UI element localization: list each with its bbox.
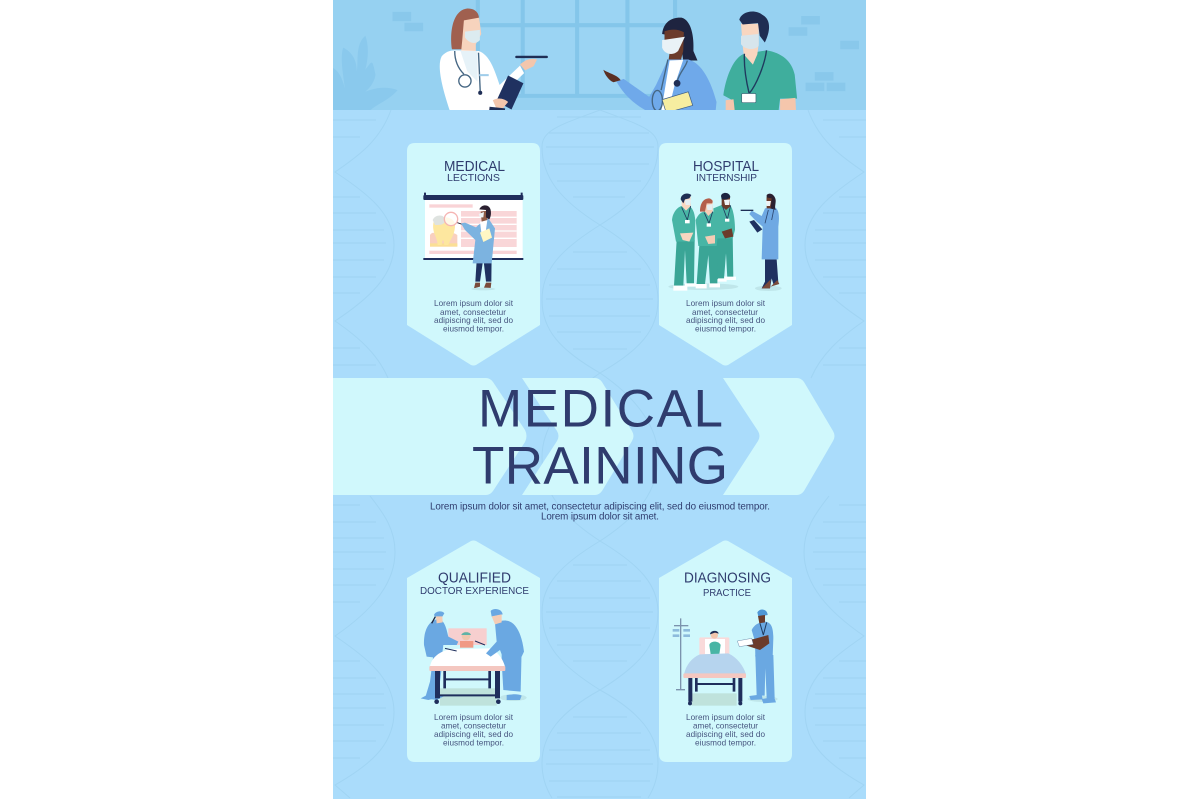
central chevrons	[333, 378, 834, 495]
illustration: lecturer at anatomy board	[423, 193, 523, 290]
illustration: surgeons at operating table	[421, 609, 527, 706]
subheading: INTERNSHIP	[696, 172, 757, 184]
doctor with yellow folder	[603, 18, 717, 113]
card shape	[659, 143, 792, 366]
window	[478, 0, 675, 96]
doctor with clipboard	[440, 8, 548, 112]
body text: Lorem ipsum dolor sit	[686, 299, 766, 308]
panel: qualified doctor experience	[407, 540, 540, 762]
body text	[434, 299, 514, 334]
subheading: LECTIONS	[447, 172, 500, 184]
card shape	[407, 540, 540, 762]
body text: adipiscing elit, sed do	[686, 316, 765, 325]
body text: Lorem ipsum dolor sit	[434, 299, 514, 308]
panel: medical lections	[407, 143, 540, 366]
subtitle text: Lorem ipsum dolor sit amet.	[541, 512, 659, 522]
header illustration: three masked doctors	[333, 0, 866, 113]
body text	[686, 299, 766, 334]
body text: eiusmod tempor.	[695, 738, 756, 748]
subtitle text: Lorem ipsum dolor sit amet, consectetur adipiscing elit, sed do eiusmod tempor.	[430, 502, 770, 512]
poster background	[333, 110, 866, 799]
heading: QUALIFIED	[438, 570, 511, 586]
card shape	[407, 143, 540, 366]
subheading: PRACTICE	[703, 587, 751, 599]
body text: Lorem ipsum dolor sit	[434, 713, 514, 722]
title: TRAINING	[472, 436, 728, 496]
panel: diagnosing practice	[659, 540, 792, 762]
plant	[333, 36, 398, 110]
illustration: interns and supervising doctor	[668, 193, 782, 291]
subtitle text	[430, 502, 770, 522]
title	[472, 380, 728, 496]
subheading: DOCTOR EXPERIENCE	[420, 585, 529, 597]
body text: amet, consectetur	[441, 722, 506, 730]
body text: adipiscing elit, sed do	[434, 316, 513, 325]
body text: eiusmod tempor.	[695, 324, 756, 334]
header wall	[333, 0, 866, 110]
heading: HOSPITAL	[693, 158, 759, 175]
body text: amet, consectetur	[693, 722, 758, 730]
wall bricks	[392, 12, 859, 91]
body text	[686, 713, 766, 748]
body text: amet, consectetur	[692, 308, 758, 317]
body text	[434, 713, 514, 748]
title: MEDICAL	[478, 380, 723, 438]
body text: adipiscing elit, sed do	[434, 730, 513, 739]
body text: adipiscing elit, sed do	[686, 730, 765, 739]
nurse in green scrubs	[723, 11, 797, 112]
body text: Lorem ipsum dolor sit	[686, 713, 766, 722]
body text: amet, consectetur	[440, 308, 506, 317]
heading: MEDICAL	[444, 158, 505, 175]
body text: eiusmod tempor.	[443, 324, 504, 334]
illustration: doctor at patient bedside	[673, 610, 778, 706]
heading: DIAGNOSING	[684, 570, 771, 586]
body text: eiusmod tempor.	[443, 738, 504, 748]
panel: hospital internship	[659, 143, 792, 366]
card shape	[659, 540, 792, 762]
